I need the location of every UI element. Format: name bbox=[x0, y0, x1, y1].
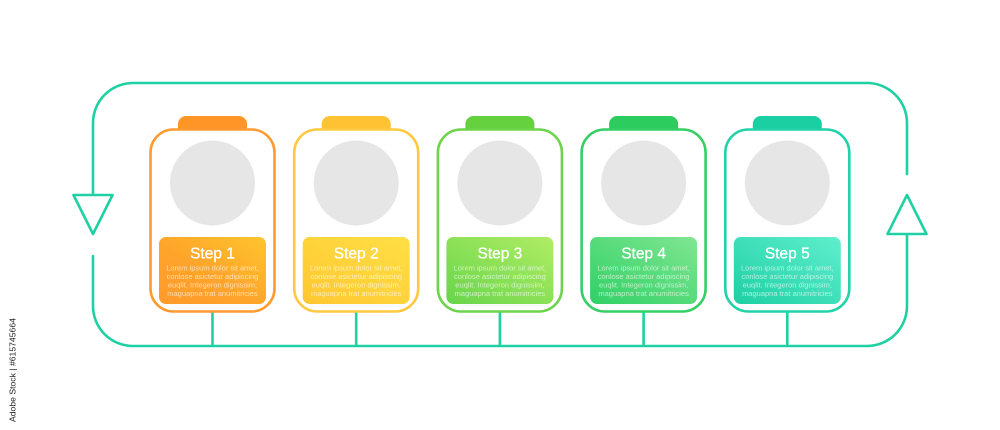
panel: step 3 bbox=[438, 116, 562, 346]
panel: step 3: euqlit. Integeron dignissim, bbox=[455, 280, 545, 290]
panel: step 2: maguapna trat anumitricies bbox=[311, 289, 402, 298]
panel: step 1: Step 1 bbox=[190, 246, 235, 262]
panel: step 5: maguapna trat anumitricies bbox=[742, 289, 833, 298]
panel: step 2: euqlit. Integeron dignissim, bbox=[312, 280, 401, 290]
panel: step 2: Lorem ipsum dolor sit amet, bbox=[310, 264, 402, 272]
arrow: right pointing up bbox=[888, 195, 926, 234]
panel: step 1: euqlit. Integeron dignissim, bbox=[168, 280, 257, 290]
cycle loop: lower path bbox=[93, 234, 907, 346]
panel: step 5: Lorem ipsum dolor sit amet, bbox=[741, 264, 834, 272]
cycle loop: upper path bbox=[93, 83, 907, 195]
panel: step 5: Step 5 bbox=[765, 246, 810, 262]
panel: step 4: conlose asictetur adipiscing bbox=[598, 272, 689, 281]
panel: step 4: euqlit. Integeron dignissim, bbox=[599, 280, 688, 290]
side credit text: Adobe Stock | #615745664 bbox=[8, 318, 18, 422]
panel: step 4: Lorem ipsum dolor sit amet, bbox=[597, 264, 690, 272]
panel: step 1 bbox=[150, 116, 274, 346]
panel: step 1: conlose asictetur adipiscing bbox=[167, 272, 258, 281]
panel: step 5: conlose asictetur adipiscing bbox=[741, 272, 833, 281]
panel: step 2: conlose asictetur adipiscing bbox=[310, 272, 402, 281]
panel: step 5 bbox=[725, 116, 849, 346]
panel: step 5: euqlit. Integeron dignissim, bbox=[743, 280, 832, 290]
arrow: left pointing down bbox=[74, 195, 112, 234]
panel: step 1: Lorem ipsum dolor sit amet, bbox=[166, 264, 259, 272]
panel: step 2: Step 2 bbox=[334, 246, 379, 262]
panel: step 3: conlose asictetur adipiscing bbox=[454, 272, 546, 281]
panel: step 2 bbox=[294, 116, 418, 346]
panel: step 3: Lorem ipsum dolor sit amet, bbox=[454, 264, 546, 272]
panel: step 4 bbox=[582, 116, 706, 346]
panel: step 3: maguapna trat anumitricies bbox=[455, 289, 545, 298]
panel: step 1: maguapna trat anumitricies bbox=[167, 289, 258, 298]
panel: step 4: maguapna trat anumitricies bbox=[598, 289, 689, 298]
panel: step 3: Step 3 bbox=[477, 246, 522, 262]
panel: step 4: Step 4 bbox=[621, 246, 666, 262]
